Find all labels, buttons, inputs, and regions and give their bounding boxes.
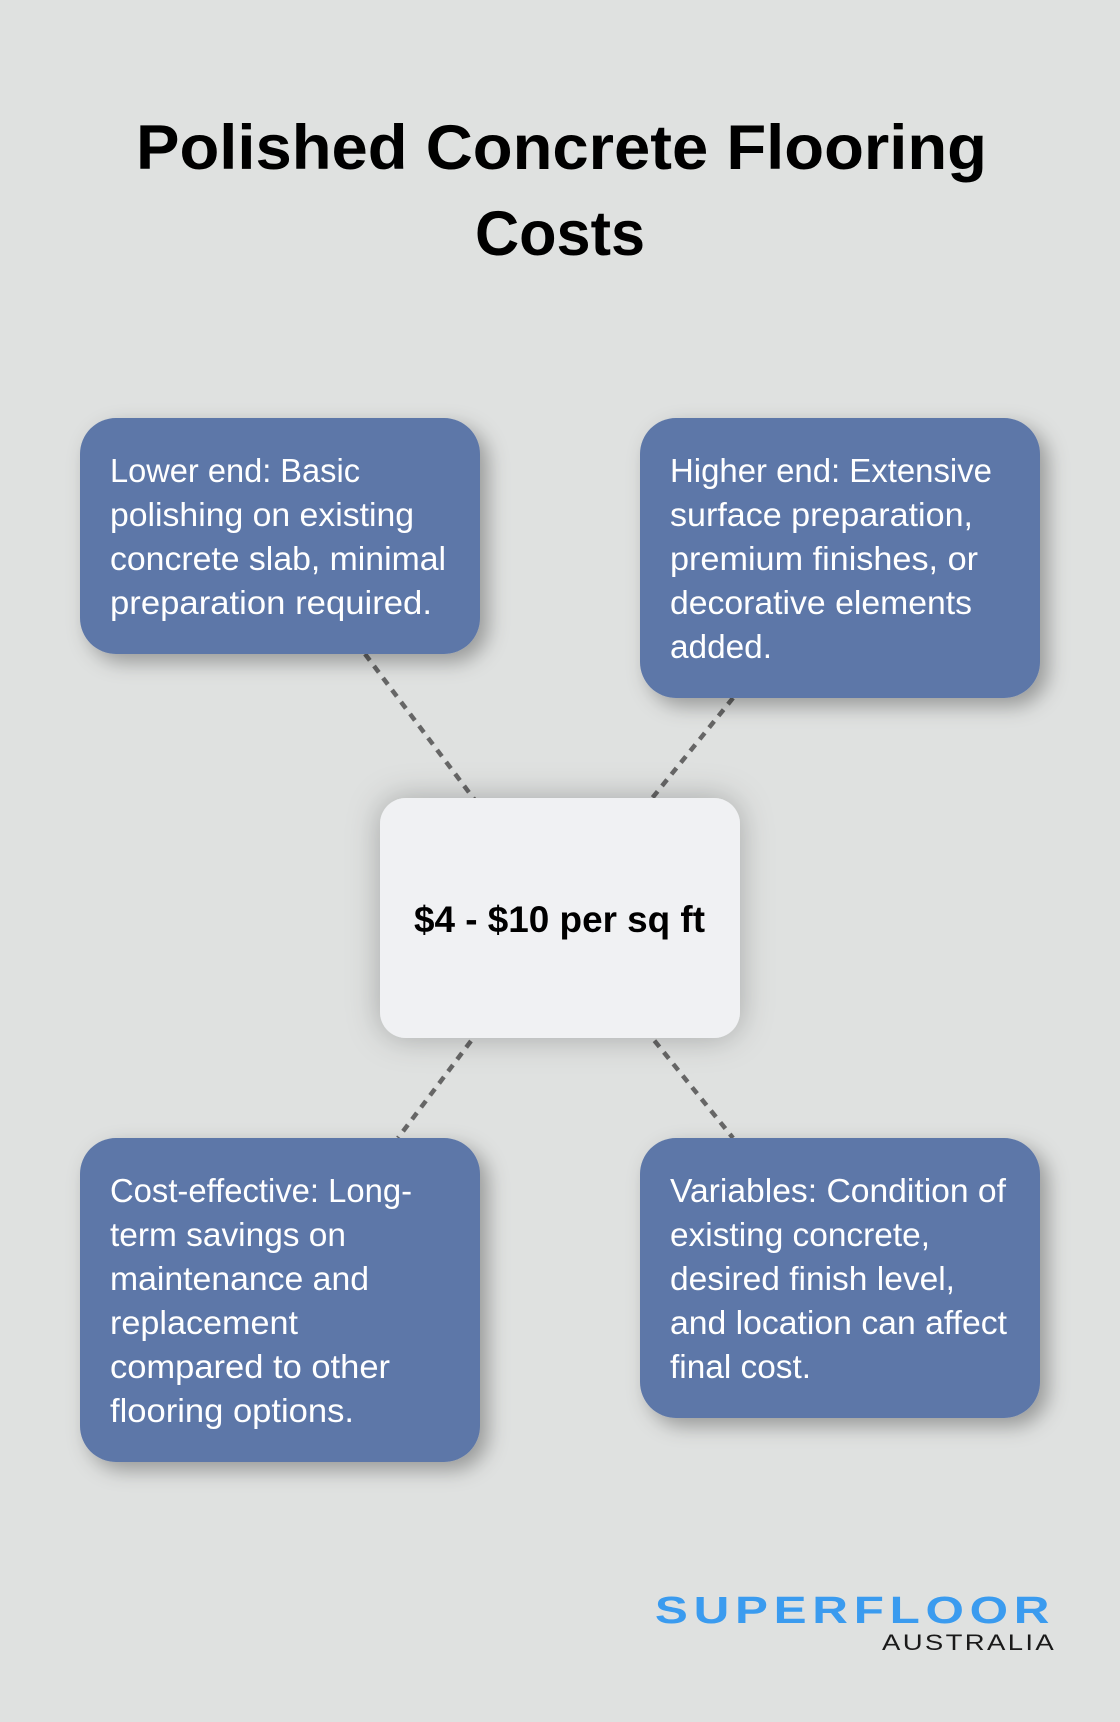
panel: variables: desired finish level, [670, 1260, 955, 1297]
panel: central price: $4 - $10 per sq ft [414, 899, 705, 940]
logo: Superfloor Australia: SUPERFLOOR [655, 1589, 1055, 1632]
panel: variables: final cost. [670, 1348, 811, 1385]
panel: cost-effective: term savings on [110, 1216, 346, 1253]
panel: lower end: polishing on existing [110, 496, 414, 533]
panel: cost-effective: flooring options. [110, 1392, 354, 1429]
panel: cost-effective: compared to other [110, 1348, 390, 1385]
title: Costs [475, 199, 645, 269]
panel: higher end [640, 418, 1040, 698]
panel: cost-effective: maintenance and [110, 1260, 369, 1297]
panel: cost-effective [80, 1138, 480, 1462]
panel: cost-effective: Cost-effective: Long- [110, 1172, 412, 1209]
dashed connectors [365, 654, 733, 1138]
panel: variables [640, 1138, 1040, 1418]
panel: variables: existing concrete, [670, 1216, 930, 1253]
panel: lower end: preparation required. [110, 584, 432, 621]
panel: lower end [80, 418, 480, 654]
panel: higher end: surface preparation, [670, 496, 973, 533]
title [136, 113, 987, 269]
panel: central price [380, 798, 740, 1038]
panel: higher end: added. [670, 628, 772, 665]
panel: lower end: Lower end: Basic [110, 452, 360, 489]
panel: cost-effective: replacement [110, 1304, 298, 1341]
title: Polished Concrete Flooring [136, 113, 987, 183]
logo: Superfloor Australia: AUSTRALIA [882, 1631, 1056, 1655]
panel: higher end: premium finishes, or [670, 540, 978, 577]
panel: variables: and location can affect [670, 1304, 1007, 1341]
panel: lower end: concrete slab, minimal [110, 540, 446, 577]
panel: variables: Variables: Condition of [670, 1172, 1007, 1209]
panel: higher end: Higher end: Extensive [670, 452, 992, 489]
panel: higher end: decorative elements [670, 584, 972, 621]
logo: Superfloor Australia [655, 1589, 1056, 1655]
